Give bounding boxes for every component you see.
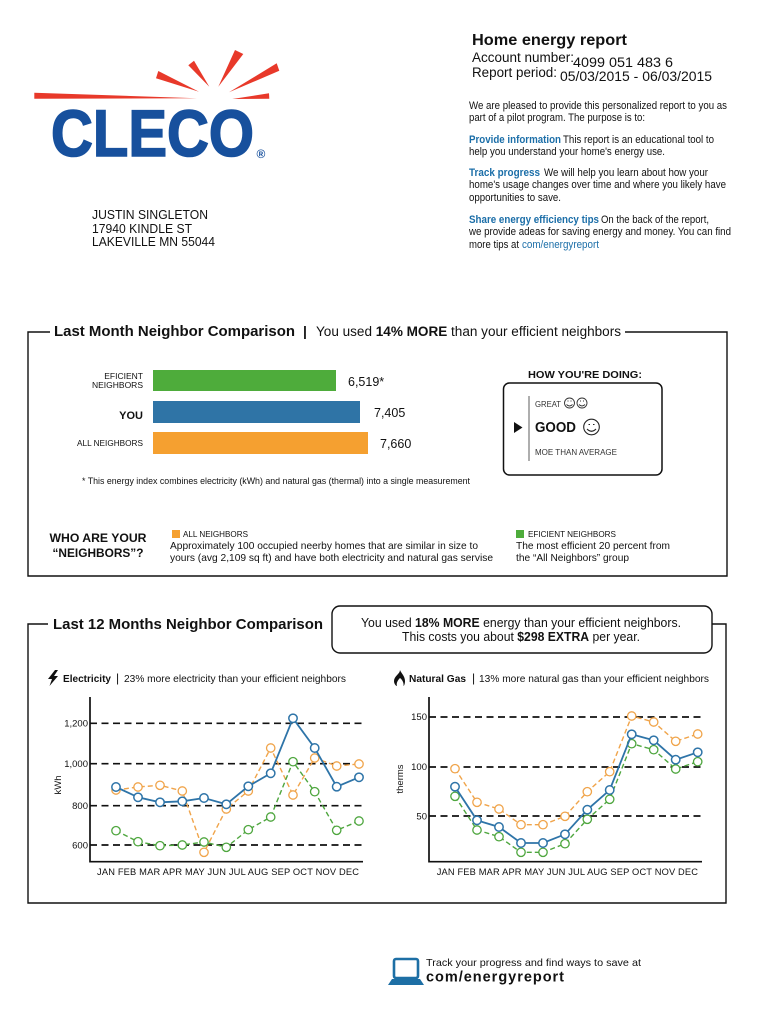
intro text block: Track progress: [469, 167, 540, 179]
natural gas heading: Natural Gas: [409, 673, 466, 685]
intro text block: opportunities to save.: [469, 192, 561, 204]
legend: efficient neighbors: EFICIENT NEIGHBORS: [528, 529, 616, 539]
intro text block: Share energy efficiency tips: [469, 214, 599, 226]
intro text block: On the back of the report,: [601, 214, 709, 226]
panel frame: [28, 332, 727, 576]
y axis labels: 600: [72, 840, 88, 851]
footer call to action: com/energyreport: [426, 970, 564, 986]
panel: last 12 months neighbor comparison: [28, 606, 726, 903]
series: all neighbors: [112, 744, 363, 856]
legend: efficient neighbors: The most efficient 20 percent from: [516, 541, 670, 552]
how you're doing rating: GREAT: [535, 399, 561, 409]
bar: efficient neighbors: EFICIENT: [104, 371, 143, 381]
panel: last month neighbor comparison: [28, 323, 727, 576]
natural gas heading: 13% more natural gas than your efficient neighbors: [479, 673, 709, 685]
footer call to action: [388, 957, 641, 986]
legend: all neighbors: Approximately 100 occupied neerby homes that are similar in size to: [170, 541, 478, 552]
customer address: JUSTIN SINGLETON: [92, 208, 208, 222]
icon: flame: [394, 670, 405, 686]
how you're doing rating: HOW YOU'RE DOING:: [528, 369, 642, 381]
natural gas heading: [394, 670, 709, 686]
series: you: [451, 730, 702, 847]
legend: all neighbors: ALL NEIGHBORS: [183, 529, 248, 539]
intro text block: We will help you learn about how your: [544, 167, 708, 179]
intro text block: we provide adeas for saving energy and money. You can find: [468, 226, 731, 238]
y axis labels: [411, 712, 427, 822]
report header: Account number:: [472, 50, 574, 65]
intro text block: This report is an educational tool to: [563, 134, 714, 146]
intro text block: part of a pilot program. The purpose is to:: [469, 112, 645, 124]
bar: efficient neighbors: 6,519*: [348, 375, 384, 389]
bar chart: neighbor comparison: [77, 370, 411, 454]
bar: you: YOU: [119, 410, 143, 422]
icon: two smileys: [564, 398, 587, 408]
report header: Report period:: [472, 65, 557, 80]
intro text block: com/energyreport: [522, 239, 599, 251]
bar: all neighbors: [77, 432, 411, 454]
electricity heading: 23% more electricity than your efficient neighbors: [124, 673, 346, 685]
y axis labels: [64, 718, 88, 851]
footnote: * This energy index combines electricity (kWh) and natural gas (thermal) into a single measurement: [82, 476, 470, 486]
legend: all neighbors: yours (avg 2,109 sq ft) and have both electricity and natural gas servise: [170, 553, 493, 564]
logo: Cleco: [34, 50, 279, 170]
who are your neighbors: WHO ARE YOUR: [50, 531, 147, 545]
bar: all neighbors: 7,660: [380, 437, 411, 451]
y axis labels: 800: [72, 801, 88, 812]
bar: all neighbors: ALL NEIGHBORS: [77, 438, 143, 448]
bar: you: 7,405: [374, 406, 405, 420]
report header: Home energy report: [472, 32, 628, 49]
intro text block: help you understand your home's energy use.: [469, 146, 665, 158]
icon: lightning bolt: [48, 670, 58, 686]
natural gas heading: |: [472, 671, 475, 685]
how you're doing rating: MOE THAN AVERAGE: [535, 447, 617, 457]
legend: efficient neighbors: [516, 529, 670, 564]
legend: efficient neighbors: the “All Neighbors” group: [516, 553, 629, 564]
panel heading: Last 12 Months Neighbor Comparison: [53, 616, 323, 633]
line chart: electricity: [53, 697, 363, 877]
report header: 4099 051 483 6: [573, 55, 673, 70]
icon: pointer arrow: [514, 422, 522, 433]
panel heading: You used 14% MORE than your efficient neighbors: [316, 324, 621, 339]
y axis title: therms: [395, 764, 406, 794]
x axis labels: JAN FEB MAR APR MAY JUN JUL AUG SEP OCT NOV DEC: [97, 867, 359, 877]
who are your neighbors: [50, 531, 147, 560]
intro text block: home's usage changes over time and where you likely have: [469, 179, 726, 191]
icon: laptop: [388, 959, 424, 985]
customer address: 17940 KINDLE ST: [92, 222, 192, 236]
intro text block: We are pleased to provide this personalized report to you as: [469, 100, 727, 112]
y axis labels: 1,200: [64, 718, 88, 730]
customer address: LAKEVILLE MN 55044: [92, 235, 215, 249]
intro text block: more tips at: [469, 239, 519, 251]
series: all neighbors: [451, 712, 702, 829]
x axis labels: JAN FEB MAR APR MAY JUN JUL AUG SEP OCT NOV DEC: [437, 867, 698, 877]
y axis labels: 1,000: [64, 759, 88, 770]
how you're doing rating: GOOD: [535, 420, 576, 436]
intro text block: [468, 100, 731, 251]
callout: yearly cost: You used 18% MORE energy than your efficient neighbors.: [361, 616, 681, 630]
y axis labels: 50: [416, 812, 427, 822]
electricity heading: [48, 670, 346, 686]
logo wordmark: CLECO: [51, 96, 254, 170]
bar: you: [119, 401, 405, 423]
y axis title: kWh: [53, 776, 64, 794]
bar: efficient neighbors: NEIGHBORS: [92, 380, 143, 390]
logo rays: [34, 50, 279, 99]
icon: smiley: [584, 419, 599, 435]
y axis labels: 100: [411, 762, 427, 773]
panel heading: |: [303, 323, 307, 339]
line chart: natural gas: [395, 697, 702, 877]
series: efficient neighbors: [451, 740, 702, 856]
callout: yearly cost: This costs you about $298 EXTRA per year.: [402, 630, 640, 644]
legend: all neighbors: [170, 529, 493, 564]
how you're doing rating: [504, 369, 662, 475]
registered mark: ®: [256, 147, 266, 161]
panel heading: Last Month Neighbor Comparison: [54, 324, 295, 340]
electricity heading: Electricity: [63, 673, 111, 685]
panel heading: [54, 323, 621, 340]
electricity heading: |: [116, 671, 119, 685]
report header: 05/03/2015 - 06/03/2015: [560, 69, 712, 84]
panel frame: [28, 624, 726, 903]
who are your neighbors: “NEIGHBORS”?: [52, 546, 144, 560]
series: efficient neighbors: [112, 758, 363, 852]
intro text block: Provide information: [469, 134, 561, 146]
report header: [472, 32, 712, 84]
customer address: [92, 208, 215, 249]
footer call to action: Track your progress and find ways to save at: [426, 957, 641, 969]
callout: yearly cost: [332, 606, 712, 653]
bar: efficient neighbors: [92, 370, 384, 391]
series: you: [112, 714, 363, 808]
y axis labels: 150: [411, 712, 427, 723]
